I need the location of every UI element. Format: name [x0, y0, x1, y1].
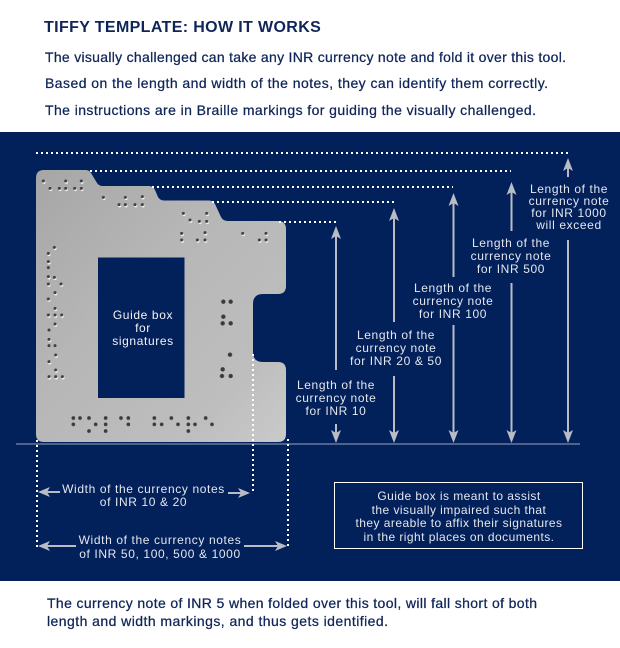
guide box label: Guide box: [113, 308, 173, 322]
length of INR 10: [296, 226, 376, 443]
length of INR 100: currency note: [413, 294, 493, 308]
width of INR 50 to 1000: Width of the currency notes: [79, 533, 241, 547]
length of INR 500: Length of the: [472, 236, 550, 250]
length of INR 20 and 50: currency note: [356, 341, 436, 355]
tiffy template plate: [36, 170, 286, 442]
length of INR 10: Length of the: [297, 378, 375, 392]
length of INR 1000: currency note: [529, 194, 609, 208]
braille markings: [43, 181, 267, 431]
dotted width guides: [37, 354, 288, 547]
length of INR 1000: will exceed: [535, 218, 602, 232]
length of INR 1000: Length of the: [530, 182, 608, 196]
footer note: length and width markings, and thus gets identified.: [47, 613, 388, 629]
width of INR 10 and 20: of INR 10 & 20: [100, 495, 187, 509]
length of INR 100: Length of the: [414, 281, 492, 295]
footer note: The currency note of INR 5 when folded over this tool, will fall short of both: [47, 595, 537, 611]
length of INR 10: for INR 10: [306, 404, 366, 418]
callout: guide box note: [334, 482, 582, 548]
callout: guide box note: Guide box is meant to assist: [377, 489, 541, 503]
length of INR 500: [471, 182, 551, 443]
title: TIFFY TEMPLATE: HOW IT WORKS: [44, 19, 322, 36]
width of INR 10 and 20: [38, 482, 250, 509]
intro text: Based on the length and width of the notes, they can identify them correctly.: [45, 75, 548, 91]
panel: diagram background: [0, 132, 620, 581]
length of INR 20 and 50: Length of the: [357, 328, 435, 342]
width of INR 50 to 1000: [38, 533, 287, 561]
callout: guide box note: in the right places on documents.: [364, 530, 554, 544]
callout: guide box note: the visually impaired such that: [372, 503, 547, 517]
length of INR 500: currency note: [471, 249, 551, 263]
guide box label: signatures: [112, 334, 174, 348]
intro text: [45, 49, 566, 118]
length of INR 20 and 50: for INR 20 & 50: [350, 354, 442, 368]
length of INR 1000: [529, 158, 609, 443]
callout: guide box note: they areable to affix their signatures: [356, 516, 562, 530]
length of INR 100: for INR 100: [419, 307, 487, 321]
intro text: The instructions are in Braille markings for guiding the visually challenged.: [45, 102, 536, 118]
footer note: [47, 595, 537, 629]
guide box label: [112, 308, 174, 348]
intro text: The visually challenged can take any INR currency note and fold it over this tool.: [45, 49, 566, 65]
guide box cutout: [98, 258, 184, 398]
dotted length guides: [36, 153, 568, 222]
length of INR 500: for INR 500: [477, 262, 545, 276]
baseline: [16, 443, 580, 445]
guide box label: for: [135, 321, 151, 335]
length of INR 1000: for INR 1000: [531, 206, 607, 220]
length of INR 10: currency note: [296, 391, 376, 405]
length of INR 100: [413, 193, 493, 443]
width of INR 50 to 1000: of INR 50, 100, 500 & 1000: [79, 547, 241, 561]
width of INR 10 and 20: Width of the currency notes: [62, 482, 225, 496]
length of INR 20 and 50: [350, 208, 442, 443]
